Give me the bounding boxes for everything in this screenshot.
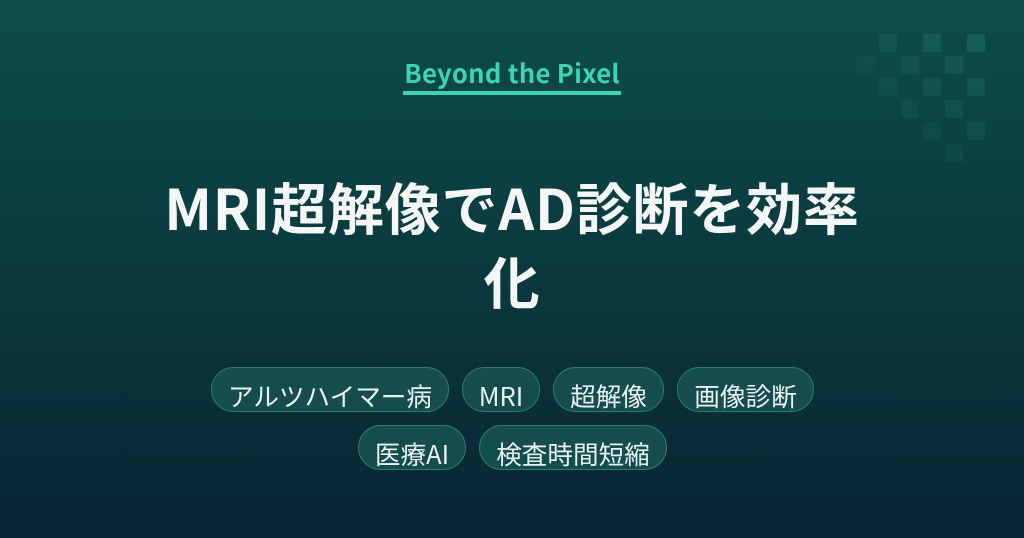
tag: 超解像: 超解像 [570, 377, 647, 414]
tag: 検査時間短縮: 検査時間短縮 [496, 435, 650, 472]
tag: アルツハイマー病: アルツハイマー病 [228, 377, 432, 414]
tag: MRI [462, 367, 540, 412]
tag: 検査時間短縮 [479, 425, 667, 470]
tag: 画像診断 [677, 367, 814, 412]
tag: MRI: MRI [479, 377, 523, 414]
title: MRI超解像でAD診断を効率 [164, 166, 860, 247]
decorative pixel pattern [879, 34, 985, 140]
brand label: Beyond the Pixel: Beyond the Pixel [404, 54, 620, 91]
tag: 画像診断: 画像診断 [694, 377, 797, 414]
tag: アルツハイマー病 [211, 367, 449, 412]
tag: 医療AI: 医療AI [375, 435, 449, 472]
title: 化 [484, 240, 540, 321]
tag: 超解像 [553, 367, 664, 412]
tag list [211, 367, 814, 472]
title [164, 166, 860, 321]
tag: 医療AI [358, 425, 466, 470]
